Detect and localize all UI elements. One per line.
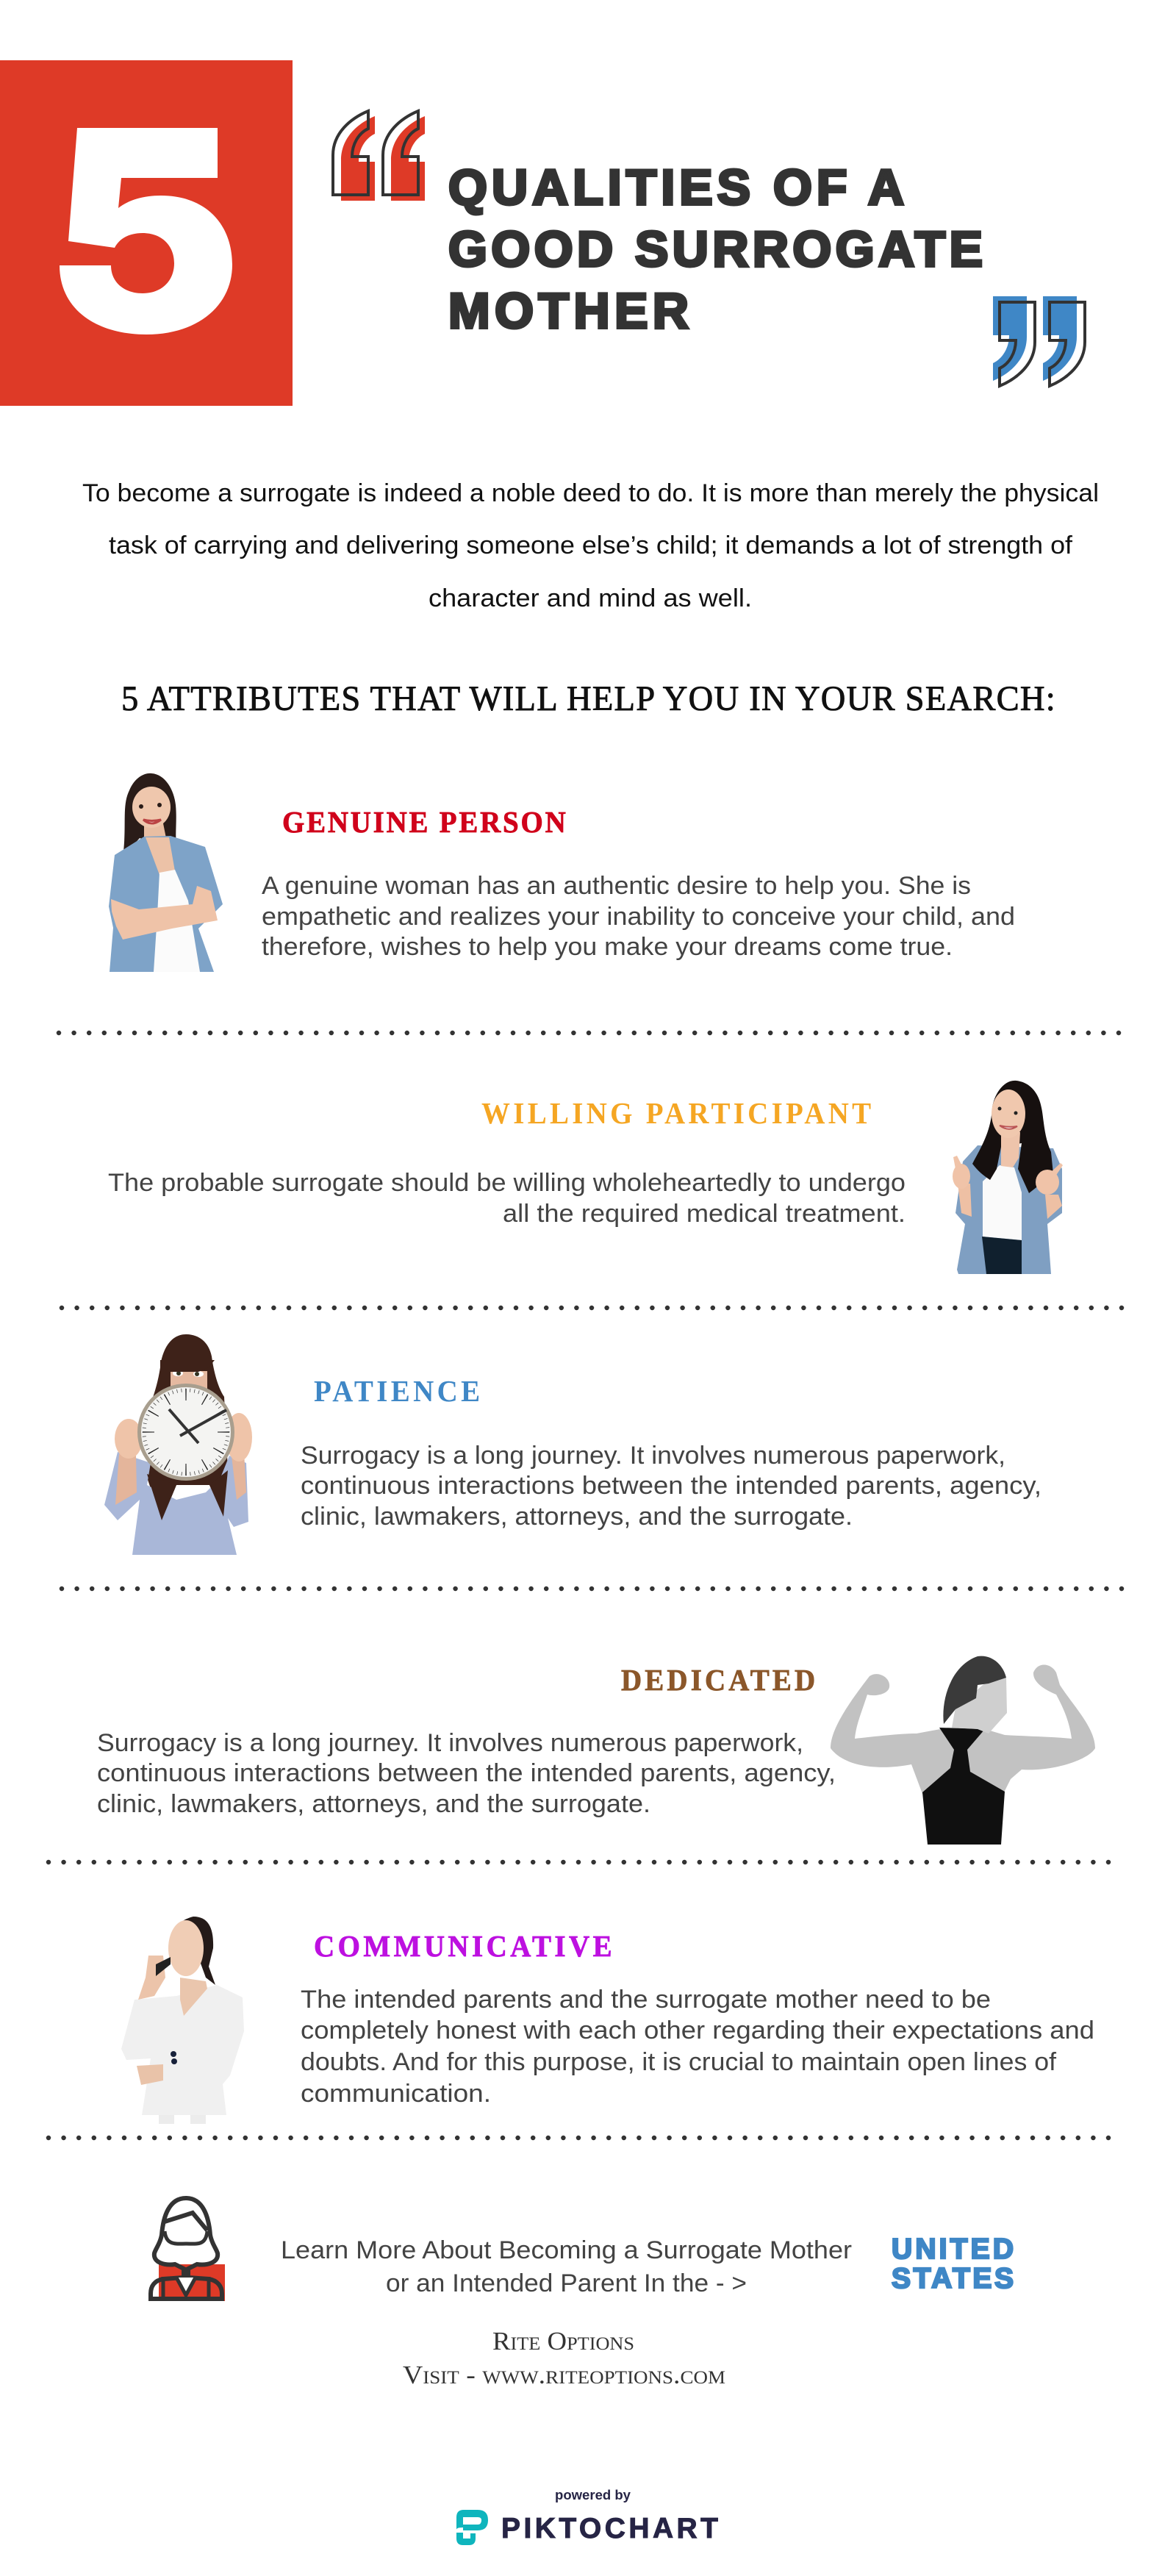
text block: patience: continuous interactions between the intended parents, agency, [301,1472,1041,1500]
intro text block [82,479,1099,612]
panel: patience [104,1334,1041,1555]
footer: powered by piktochart: powered by [555,2488,631,2502]
text block: communicative: communication. [301,2080,491,2108]
icon: woman avatar [151,2198,225,2301]
location label: UNITED [892,2233,1014,2265]
panel: dedicated [97,1656,1095,1845]
text block: willing participant: all the required medical treatment. [503,1200,906,1228]
intro text block: To become a surrogate is indeed a noble deed to do. It is more than merely the physical [82,479,1099,507]
text block: patience: Surrogacy is a long journey. It involves numerous paperwork, [301,1442,1005,1470]
text block: communicative: doubts. And for this purpose, it is crucial to maintain open lines of [301,2048,1057,2076]
heading: patience: PATIENCE [314,1374,480,1408]
icon: opening quotation marks [333,111,425,201]
intro text block: character and mind as well. [429,584,752,612]
text block: communicative: The intended parents and the surrogate mother need to be [301,1986,991,2014]
text block: communicative [301,1986,1094,2108]
intro text block: task of carrying and delivering someone else’s child; it demands a lot of strength of [109,532,1073,559]
text block: willing participant [108,1169,906,1228]
icon: closing quotation marks [993,296,1085,386]
photo: woman on the phone [121,1917,244,2124]
text block: willing participant: The probable surrogate should be willing wholeheartedly to undergo [108,1169,906,1197]
text block: dedicated: continuous interactions between the intended parents, agency, [97,1759,836,1787]
company and website: Rite Options [492,2327,634,2355]
text block: dedicated [97,1729,836,1818]
photo: woman flexing arms from behind [831,1656,1095,1845]
text block: genuine person: empathetic and realizes your inability to conceive your child, and [262,903,1015,931]
text block: communicative: completely honest with each other regarding their expectations and [301,2017,1094,2044]
title: QUALITIES OF A [448,160,904,215]
panel: willing participant [108,1081,1063,1274]
location label [892,2233,1014,2294]
text block: genuine person: A genuine woman has an authentic desire to help you. She is [262,872,971,900]
heading: dedicated: DEDICATED [621,1663,815,1697]
title: MOTHER [448,283,689,339]
section heading: 5 ATTRIBUTES THAT WILL HELP YOU IN YOUR SEARCH: [121,679,1055,718]
text block: dedicated: clinic, lawmakers, attorneys, and the surrogate. [97,1790,650,1818]
call to action text: or an Intended Parent In the - > [386,2269,747,2297]
photo: woman with thumbs up [953,1081,1063,1274]
call to action text: Learn More About Becoming a Surrogate Mother [281,2236,852,2264]
text block: patience: clinic, lawmakers, attorneys, and the surrogate. [301,1503,853,1531]
call to action text [281,2236,852,2297]
text block: genuine person: therefore, wishes to help you make your dreams come true. [262,933,953,961]
footer: powered by piktochart: PIKTOCHART [501,2513,718,2544]
panel: communicative [121,1917,1094,2124]
photo: woman holding a clock [104,1334,252,1555]
text block: dedicated: Surrogacy is a long journey. It involves numerous paperwork, [97,1729,803,1757]
heading: communicative: COMMUNICATIVE [314,1929,612,1963]
icon: piktochart logo [456,2510,488,2545]
heading: genuine person: GENUINE PERSON [282,805,566,839]
text block: genuine person [262,872,1015,961]
company and website [403,2327,725,2389]
title [448,160,983,339]
location label: STATES [892,2263,1014,2294]
text block: patience [301,1442,1041,1531]
heading: willing participant: WILLING PARTICIPANT [481,1096,871,1130]
footer: powered by piktochart [456,2488,718,2545]
photo: woman with crossed arms [109,773,223,972]
title: GOOD SURROGATE [448,221,983,277]
company and website: Visit - www.riteoptions.com [403,2361,725,2389]
panel: genuine person [109,773,1015,972]
panel: big number five [0,60,293,406]
